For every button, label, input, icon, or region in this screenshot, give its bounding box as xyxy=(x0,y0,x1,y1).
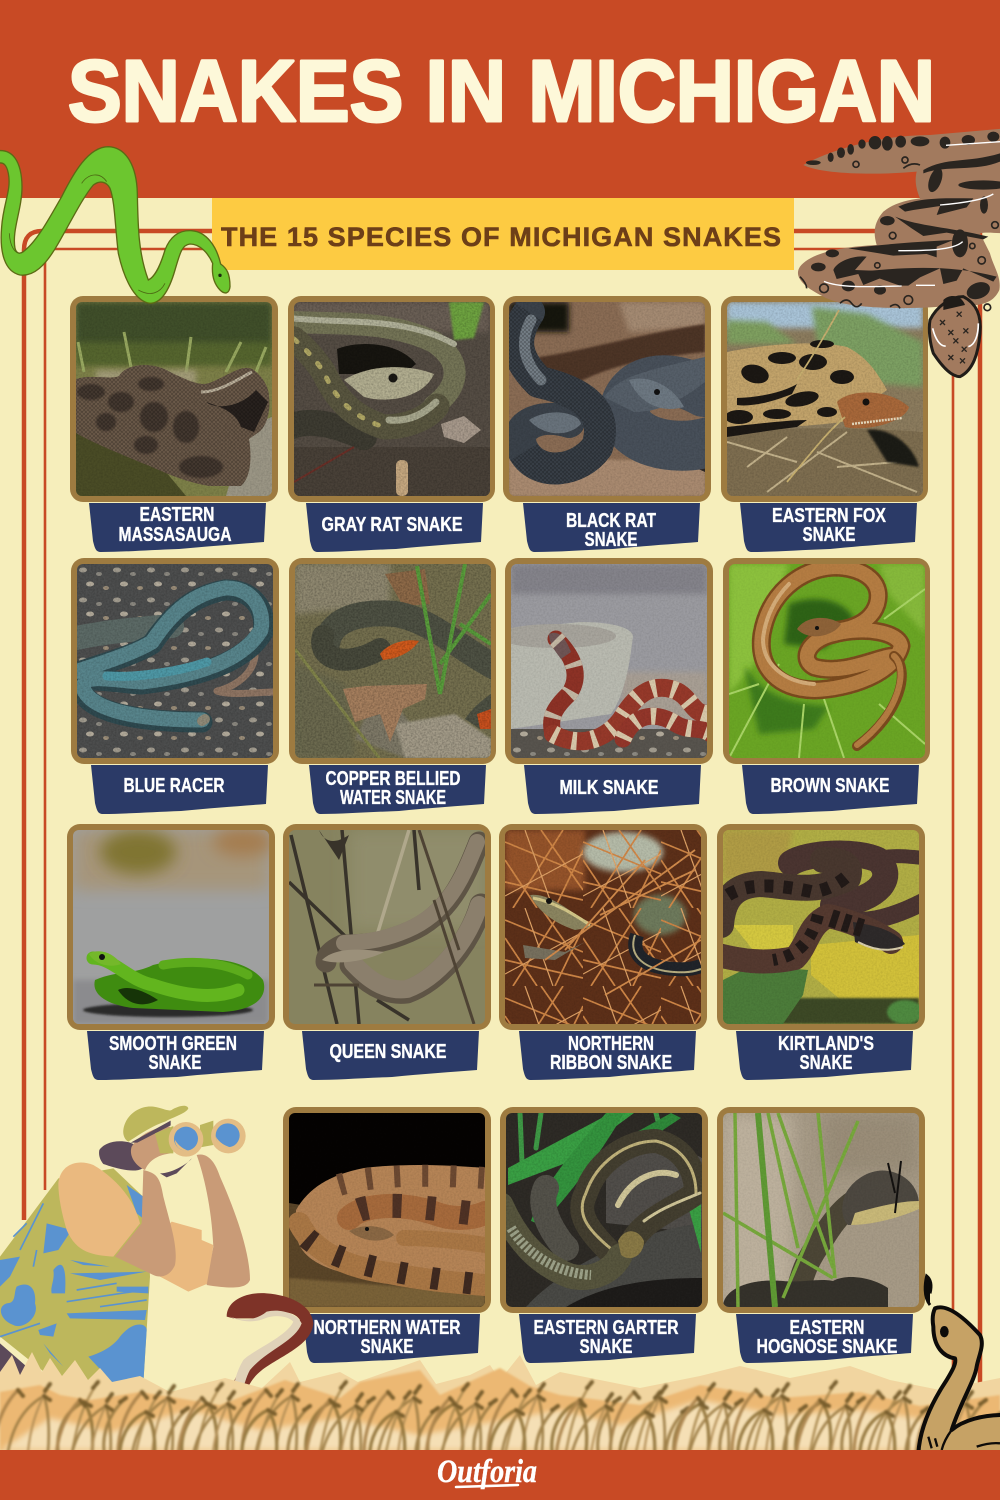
label: northern water snake xyxy=(303,1314,480,1363)
label: brown snake: BROWN SNAKE xyxy=(770,775,890,797)
photo card: eastern massasauga xyxy=(70,296,278,502)
grass band xyxy=(0,1352,1000,1462)
label: eastern fox snake: EASTERN FOX xyxy=(772,505,887,527)
photo card: milk snake xyxy=(496,558,713,764)
label: northern water snake: NORTHERN WATER xyxy=(314,1317,461,1339)
decorative frame lines xyxy=(24,231,980,1400)
label: eastern hognose snake: HOGNOSE SNAKE xyxy=(756,1336,898,1358)
label: eastern hognose snake xyxy=(736,1314,913,1363)
label: blue racer: BLUE RACER xyxy=(124,775,225,797)
label: blue racer xyxy=(91,765,268,814)
label: smooth green snake: SMOOTH GREEN xyxy=(109,1033,237,1055)
illustration: tan cartoon snake xyxy=(918,1276,1000,1453)
photo card: eastern fox snake xyxy=(721,296,928,502)
footer band xyxy=(0,1450,1000,1500)
label: smooth green snake: SNAKE xyxy=(148,1052,202,1074)
photo card: black rat snake xyxy=(503,296,711,502)
photo card: gray rat snake xyxy=(288,296,495,502)
label: eastern massasauga: MASSASAUGA xyxy=(118,524,232,546)
header band xyxy=(0,0,1000,198)
label: northern ribbon snake: NORTHERN xyxy=(568,1033,654,1055)
footer logo: Outforia xyxy=(437,1454,537,1490)
label: northern water snake: SNAKE xyxy=(360,1336,414,1358)
photo card: blue racer xyxy=(71,558,279,764)
label: northern ribbon snake: RIBBON SNAKE xyxy=(550,1052,672,1074)
label: eastern garter snake: EASTERN GARTER xyxy=(534,1317,679,1339)
label: milk snake xyxy=(524,765,701,814)
label: black rat snake: SNAKE xyxy=(584,529,638,551)
label: milk snake: MILK SNAKE xyxy=(560,777,658,799)
illustration: red-brown snake xyxy=(223,1293,313,1417)
label: queen snake xyxy=(302,1031,479,1080)
label: copper bellied water snake: WATER SNAKE xyxy=(340,787,446,809)
label: copper bellied water snake: COPPER BELLIED xyxy=(326,768,460,790)
label: black rat snake: BLACK RAT xyxy=(566,510,656,532)
label: smooth green snake xyxy=(87,1031,264,1080)
label: copper bellied water snake xyxy=(309,765,486,814)
photo card: smooth green snake xyxy=(67,824,275,1030)
label: gray rat snake xyxy=(306,503,483,552)
photo card: northern ribbon snake xyxy=(499,824,707,1030)
label: eastern fox snake: SNAKE xyxy=(802,524,856,546)
label: kirtland's snake: KIRTLAND'S xyxy=(778,1033,874,1055)
subtitle banner xyxy=(212,198,794,270)
photo card: eastern garter snake xyxy=(500,1107,708,1313)
label: eastern hognose snake: EASTERN xyxy=(790,1317,864,1339)
label: brown snake xyxy=(742,765,919,814)
photo card: brown snake xyxy=(723,558,930,764)
photo card: kirtland's snake xyxy=(717,824,925,1030)
photo card: queen snake xyxy=(283,824,491,1030)
label: eastern fox snake xyxy=(740,503,917,552)
illustration: green snake xyxy=(0,147,230,303)
label: kirtland's snake xyxy=(736,1031,913,1080)
label: eastern garter snake: SNAKE xyxy=(580,1336,632,1358)
title: SNAKES IN MICHIGAN xyxy=(68,43,935,140)
illustration: spotted brown snake xyxy=(798,128,1000,377)
photo card: northern water snake xyxy=(283,1107,491,1313)
subtitle banner: THE 15 SPECIES OF MICHIGAN SNAKES xyxy=(221,222,781,252)
label: black rat snake xyxy=(523,503,700,552)
photo card: eastern hognose snake xyxy=(717,1107,925,1313)
label: queen snake: QUEEN SNAKE xyxy=(330,1041,446,1063)
photo card: copper bellied water snake xyxy=(289,558,496,764)
label: gray rat snake: GRAY RAT SNAKE xyxy=(322,514,462,536)
label: kirtland's snake: SNAKE xyxy=(800,1052,852,1074)
label: eastern massasauga xyxy=(89,503,266,552)
label: northern ribbon snake xyxy=(519,1031,696,1080)
illustration: person with binoculars xyxy=(0,1106,250,1420)
label: eastern massasauga: EASTERN xyxy=(140,504,214,526)
label: eastern garter snake xyxy=(519,1314,696,1363)
